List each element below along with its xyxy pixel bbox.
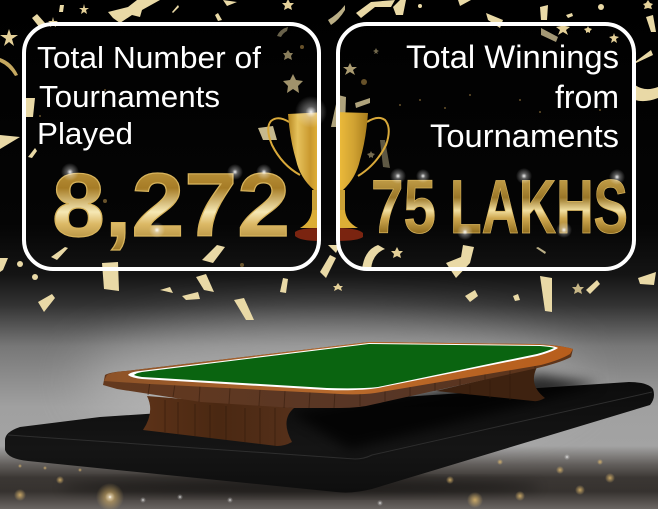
poker table xyxy=(103,342,600,450)
floor glitter xyxy=(14,454,615,509)
stat: 75 lakhs: 75 xyxy=(371,165,436,250)
sparkles xyxy=(61,96,625,240)
rim planks xyxy=(148,357,535,408)
heading: total winnings from tournaments: Total Winnings xyxy=(406,39,619,75)
heading: total winnings from tournaments: Tournaments xyxy=(430,118,619,154)
trophy: right half xyxy=(335,112,389,241)
phone xyxy=(5,382,654,495)
panel: total tournaments xyxy=(24,24,319,269)
heading: total number of tournaments played: Tournaments xyxy=(39,79,220,114)
table white trim xyxy=(128,343,558,390)
heading: total number of tournaments played: Played xyxy=(37,116,133,151)
leg planks xyxy=(165,376,510,446)
gold stars xyxy=(0,0,653,294)
stat: 75 lakhs xyxy=(371,165,628,250)
green felt xyxy=(134,344,554,388)
dust particles xyxy=(39,45,601,267)
trophy xyxy=(268,112,389,241)
panel border xyxy=(24,24,319,269)
trophy: left half xyxy=(267,112,317,241)
panel: total winnings xyxy=(338,24,634,269)
confetti xyxy=(0,0,658,320)
shadow under table xyxy=(290,374,600,450)
phone body xyxy=(5,382,654,493)
table rim top xyxy=(104,342,573,394)
stat: 8,272: 8,272 xyxy=(52,156,290,256)
table rim side xyxy=(103,342,573,408)
back leg xyxy=(436,367,545,401)
phone edge highlight xyxy=(8,392,652,459)
heading: total number of tournaments played: Total Number of xyxy=(37,40,261,75)
panel border xyxy=(338,24,634,269)
heading: total winnings from tournaments: from xyxy=(555,79,619,115)
front leg xyxy=(143,396,294,446)
